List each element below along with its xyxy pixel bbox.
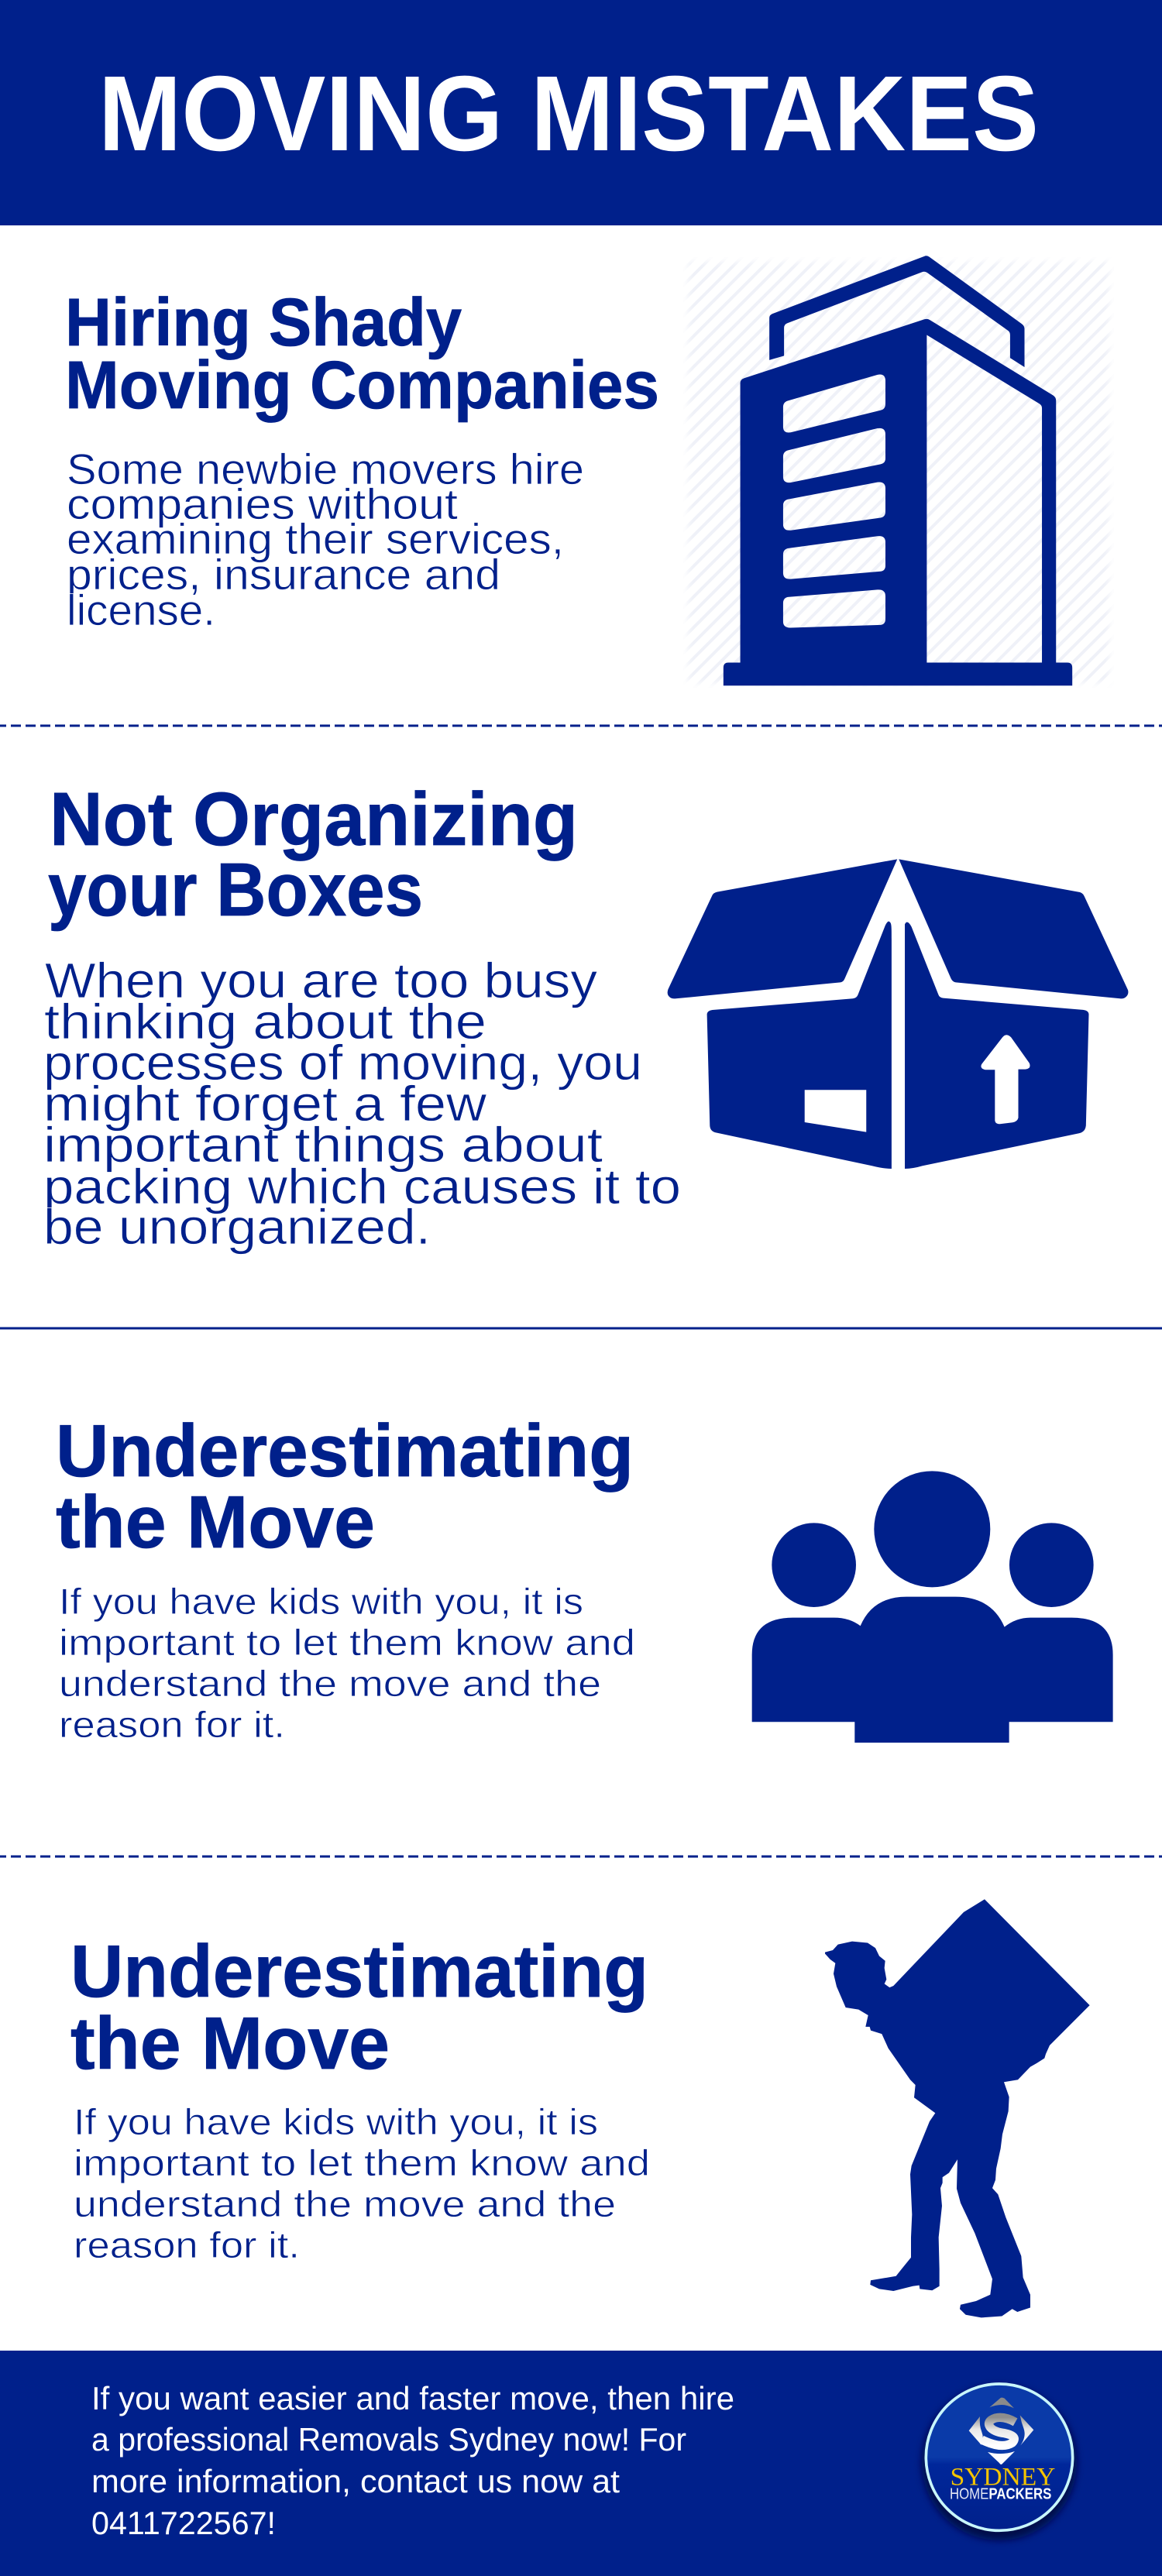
panel: underestimating the move (first): [56, 1410, 1113, 1745]
body text: boxes: [43, 953, 681, 1255]
body text: kids: If you have kids with you, it is: [74, 2101, 598, 2142]
icon: open cardboard box: [668, 859, 1128, 1169]
body text: hiring: companies without: [67, 479, 458, 528]
body text: hiring: license.: [67, 586, 215, 634]
footer call to action: If you want easier and faster move, then hire: [91, 2380, 734, 2416]
logo: sydney homepackers: SYDNEY: [951, 2463, 1055, 2491]
heading: underestimating the move: Underestimating: [70, 1930, 648, 2013]
heading: hiring shady moving companies: [65, 285, 659, 423]
icon: office building: [683, 256, 1114, 688]
heading: underestimating the move: [56, 1410, 634, 1564]
footer call to action: 0411722567!: [91, 2505, 276, 2541]
panel: hiring shady moving companies: [65, 256, 1114, 688]
heading: not organizing your boxes: [48, 777, 578, 932]
body text: kids: [74, 2101, 650, 2265]
logo: sydney homepackers: [922, 2384, 1077, 2540]
panel: underestimating the move (second): [70, 1899, 1090, 2317]
logo: sydney homepackers: HOMEPACKERS: [950, 2486, 1051, 2503]
footer call to action: more information, contact us now at: [91, 2463, 620, 2499]
heading: underestimating the move: the Move: [70, 2002, 390, 2085]
heading: not organizing your boxes: Not Organizing: [50, 777, 578, 861]
header band: [0, 0, 1162, 225]
body text: kids: reason for it.: [74, 2224, 300, 2265]
icon: man carrying box: [825, 1899, 1090, 2317]
icon: group of three people: [752, 1471, 1113, 1743]
heading: underestimating the move: the Move: [56, 1481, 375, 1564]
panel: not organizing your boxes: [43, 777, 1128, 1255]
body text: boxes: might forget a few: [43, 1076, 487, 1132]
body text: kids: important to let them know and: [74, 2142, 650, 2183]
body text: kids: reason for it.: [59, 1704, 285, 1745]
footer call to action: a professional Removals Sydney now! For: [91, 2421, 686, 2458]
heading: not organizing your boxes: your Boxes: [48, 847, 423, 932]
footer call to action: [91, 2380, 734, 2541]
body text: boxes: important things about: [43, 1117, 603, 1173]
body text: kids: important to let them know and: [59, 1622, 635, 1663]
body text: hiring: prices, insurance and: [67, 550, 500, 599]
body text: boxes: thinking about the: [44, 994, 486, 1049]
heading: underestimating the move: Underestimating: [56, 1410, 634, 1492]
body text: kids: understand the move and the: [59, 1663, 601, 1704]
body text: kids: understand the move and the: [74, 2183, 616, 2224]
title: MOVING MISTAKES: [98, 54, 1039, 173]
footer band: [0, 2351, 1162, 2576]
body text: boxes: When you are too busy: [45, 953, 597, 1008]
heading: underestimating the move: [70, 1930, 648, 2085]
body text: boxes: packing which causes it to: [43, 1159, 681, 1214]
body text: hiring: [67, 445, 584, 634]
body text: kids: [59, 1581, 635, 1745]
body text: hiring: examining their services,: [67, 514, 564, 563]
body text: kids: If you have kids with you, it is: [59, 1581, 583, 1622]
heading: hiring shady moving companies: Hiring Shady: [65, 285, 462, 360]
heading: hiring shady moving companies: Moving Companies: [65, 348, 659, 423]
body text: boxes: be unorganized.: [43, 1199, 431, 1255]
body text: boxes: processes of moving, you: [43, 1035, 642, 1091]
body text: hiring: Some newbie movers hire: [67, 445, 584, 493]
